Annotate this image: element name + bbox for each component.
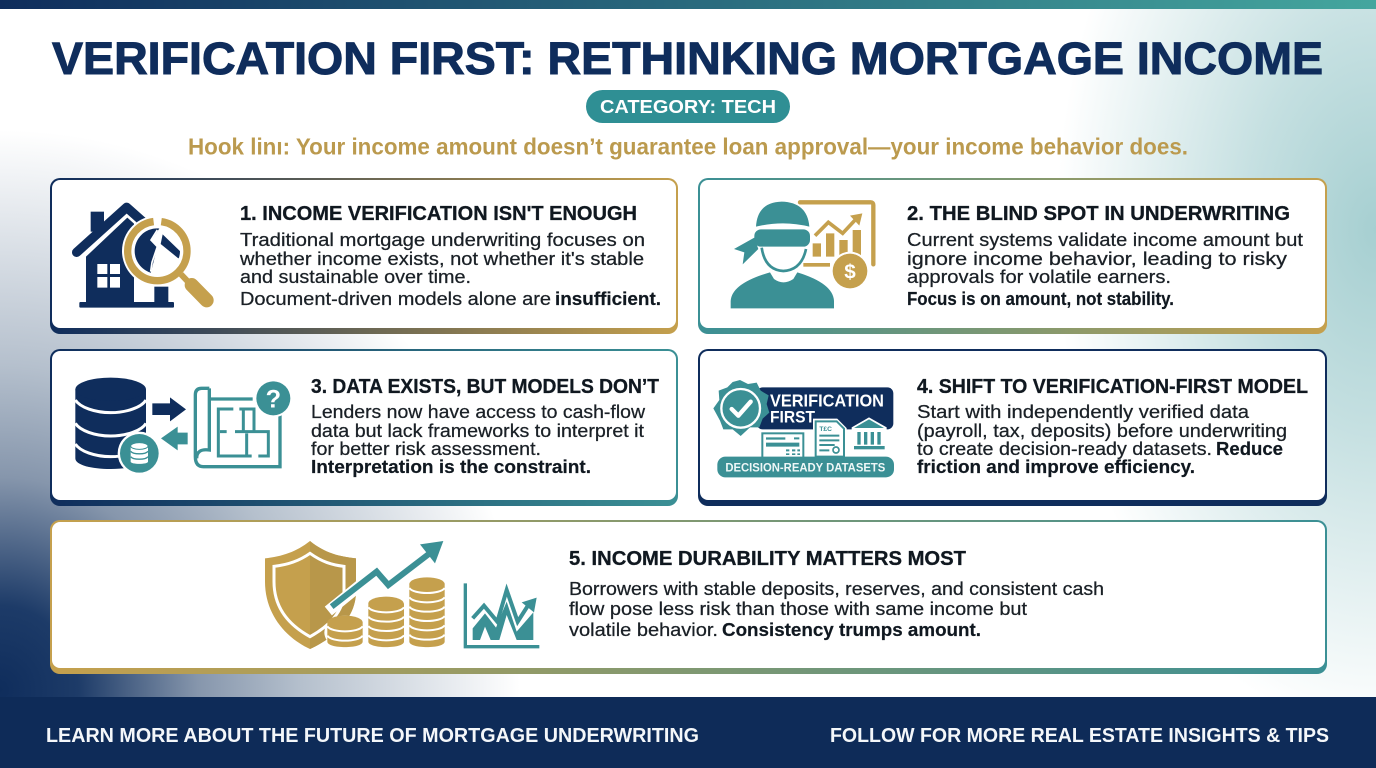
body text: Current systems validate income amount but — [907, 230, 1303, 250]
heading: 3. DATA EXISTS, BUT MODELS DON’T — [311, 376, 659, 398]
icon: blindfolded person with chart — [731, 202, 873, 308]
body text: volatile behavior. — [569, 620, 718, 640]
footer left call to action: LEARN MORE ABOUT THE FUTURE OF MORTGAGE UNDERWRITING — [46, 725, 699, 747]
body text — [907, 230, 1303, 309]
panel: 1 income verification — [50, 178, 678, 334]
body text: to create decision-ready datasets. — [917, 439, 1212, 459]
body text: Focus is on amount, not stability. — [907, 289, 1174, 309]
heading: 4. SHIFT TO VERIFICATION-FIRST MODEL — [917, 376, 1308, 398]
panel: 2 blind spot — [698, 178, 1327, 334]
icon: verification first badge and datasets: T£C — [819, 426, 832, 433]
icon: verification first badge and datasets: FIRST — [770, 408, 815, 427]
panel: 4 shift to verification-first — [698, 349, 1327, 506]
body text: Start with independently verified data — [917, 402, 1250, 422]
top accent bar — [0, 0, 1376, 9]
title: VERIFICATION FIRST: RETHINKING MORTGAGE INCOME — [52, 33, 1323, 84]
body text: data but lack frameworks to interpret it — [311, 421, 644, 441]
footer banner — [0, 697, 1376, 768]
body text: whether income exists, not whether it's stable — [239, 249, 644, 269]
body text: and sustainable over time. — [240, 267, 471, 287]
body text: Traditional mortgage underwriting focuses on — [240, 230, 645, 250]
heading: 1. INCOME VERIFICATION ISN'T ENOUGH — [240, 203, 637, 225]
body text: friction and improve efficiency. — [917, 457, 1195, 477]
heading: 2. THE BLIND SPOT IN UNDERWRITING — [907, 203, 1290, 225]
icon: blindfolded person with chart: $ — [844, 260, 856, 283]
panel: 5 income durability — [50, 520, 1327, 674]
category pill — [586, 90, 790, 123]
icon: shield, coin stacks and rising charts — [265, 541, 539, 649]
body text — [311, 402, 646, 477]
body text: insufficient. — [555, 289, 661, 309]
heading: 5. INCOME DURABILITY MATTERS MOST — [569, 548, 966, 570]
body text: for better risk assessment. — [311, 439, 541, 459]
footer right call to action: FOLLOW FOR MORE REAL ESTATE INSIGHTS & TIPS — [830, 725, 1329, 747]
hook line: Hook linı: Your income amount doesn’t guarantee loan approval—your income behavior does. — [188, 134, 1188, 160]
icon: database and blueprint — [75, 378, 292, 475]
body text — [917, 402, 1287, 477]
body text: (payroll, tax, deposits) before underwriting — [917, 421, 1287, 441]
icon: verification first badge and datasets: DECISION-READY DATASETS — [725, 461, 885, 475]
body text: Reduce — [1216, 439, 1283, 459]
icon: database and blueprint: ? — [266, 385, 281, 413]
body text: ignore income behavior, leading to risky — [907, 249, 1287, 269]
body text: Document-driven models alone are — [240, 289, 551, 309]
body text — [569, 579, 1104, 640]
icon: verification first badge and datasets: VERIFICATION — [770, 391, 884, 411]
body text: Consistency trumps amount. — [722, 620, 981, 640]
body text: flow pose less risk than those with same income but — [569, 599, 1027, 619]
icon: cracked house under magnifier — [77, 207, 207, 308]
body text: Borrowers with stable deposits, reserves, and consistent cash — [569, 579, 1104, 599]
panel: 3 data exists — [50, 349, 678, 506]
body text — [239, 230, 661, 309]
category pill: CATEGORY: TECH — [600, 97, 776, 117]
body text: Lenders now have access to cash-flow — [311, 402, 646, 422]
body text: Interpretation is the constraint. — [311, 457, 591, 477]
body text: approvals for volatile earners. — [907, 267, 1171, 287]
icon: verification first badge and datasets — [713, 380, 894, 477]
